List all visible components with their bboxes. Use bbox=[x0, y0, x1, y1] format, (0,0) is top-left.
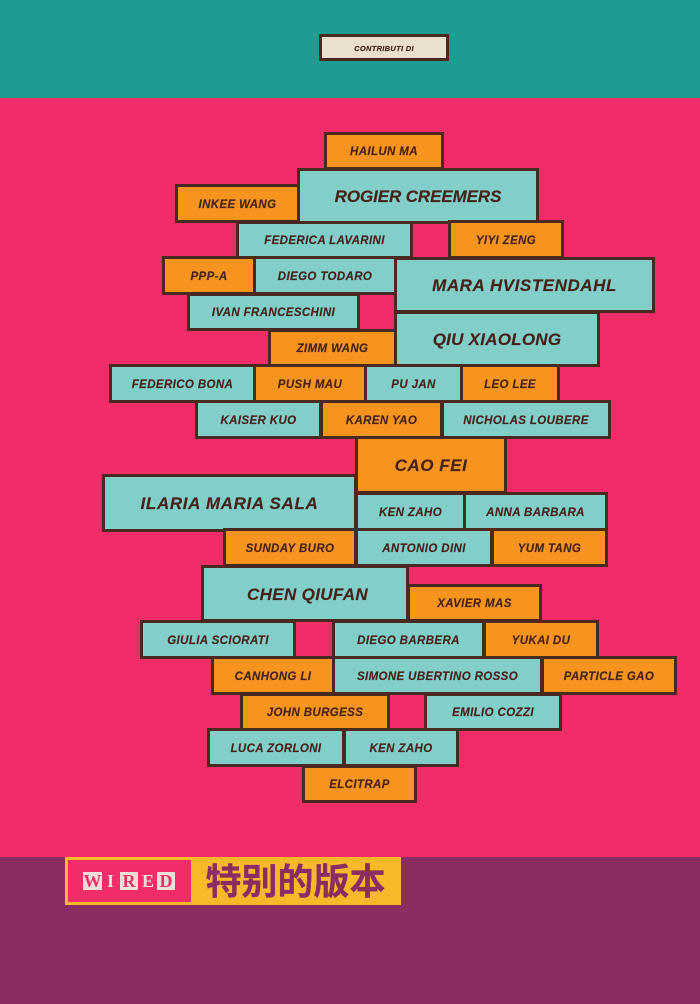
WIRED logo panel bbox=[68, 860, 191, 902]
brick: Xavier Mas bbox=[407, 584, 542, 622]
brick: PPP-A bbox=[162, 256, 256, 295]
brick: Antonio Dini bbox=[355, 528, 493, 567]
brick: Anna Barbara: ANNA BARBARA bbox=[486, 506, 585, 518]
brick: Nicholas Loubere: NICHOLAS LOUBERE bbox=[463, 414, 589, 426]
WIRED logo wordmark: I bbox=[107, 871, 114, 891]
brick: Sunday Buro bbox=[223, 528, 357, 567]
brick: Ilaria Maria Sala bbox=[102, 474, 357, 532]
teal header band bbox=[0, 0, 700, 98]
brick: Federica Lavarini bbox=[236, 221, 413, 259]
brick: Sunday Buro: SUNDAY BURO bbox=[246, 542, 334, 554]
brick: Push Mau bbox=[253, 364, 367, 403]
Chinese title: special edition: 特别的版本 bbox=[206, 861, 386, 902]
brick: Canhong Li: CANHONG LI bbox=[235, 670, 311, 682]
brick: Xavier Mas: XAVIER MAS bbox=[437, 598, 512, 610]
brick: John Burgess bbox=[240, 693, 390, 731]
brick: Qiu Xiaolong: QIU XIAOLONG bbox=[433, 330, 561, 349]
yellow special edition banner bbox=[65, 857, 401, 905]
brick: Luca Zorloni bbox=[207, 728, 345, 767]
brick: Yum Tang bbox=[491, 528, 608, 567]
brick: Simone Ubertino Rosso bbox=[332, 656, 543, 695]
brick: Simone Ubertino Rosso: SIMONE UBERTINO ROSSO bbox=[357, 670, 518, 682]
brick: Yum Tang: YUM TANG bbox=[518, 542, 581, 554]
brick: John Burgess: JOHN BURGESS bbox=[267, 707, 363, 719]
brick: Ken Zaho (second): KEN ZAHO bbox=[369, 742, 433, 754]
brick: Particle Gao bbox=[541, 656, 677, 695]
brick: Leo Lee: LEO LEE bbox=[484, 378, 536, 390]
brick: Diego Barbera: DIEGO BARBERA bbox=[357, 634, 460, 646]
WIRED logo wordmark: D bbox=[160, 871, 172, 891]
brick: Hailun Ma bbox=[324, 132, 444, 170]
brick: Push Mau: PUSH MAU bbox=[278, 378, 342, 390]
brick: Elcitrap bbox=[302, 765, 417, 803]
WIRED logo wordmark bbox=[83, 871, 175, 891]
brick: Giulia Sciorati: GIULIA SCIORATI bbox=[167, 634, 269, 646]
brick: Ken Zaho: KEN ZAHO bbox=[379, 506, 442, 518]
WIRED logo wordmark: E bbox=[142, 871, 154, 891]
brick: Rogier Creemers: ROGIER CREEMERS bbox=[335, 187, 501, 206]
brick: Federico Bona bbox=[109, 364, 256, 403]
purple footer band bbox=[0, 857, 700, 1004]
brick: Rogier Creemers bbox=[297, 168, 539, 224]
brick: Luca Zorloni: LUCA ZORLONI bbox=[230, 742, 322, 754]
brick: Emilio Cozzi: EMILIO COZZI bbox=[452, 707, 534, 719]
brick: Karen Yao bbox=[320, 400, 443, 439]
brick: Elcitrap: ELCITRAP bbox=[329, 779, 390, 791]
brick: Yiyi Zeng bbox=[448, 220, 564, 259]
brick: Kaiser Kuo: KAISER KUO bbox=[220, 414, 296, 426]
brick: Ken Zaho (second) bbox=[343, 728, 459, 767]
brick: Leo Lee bbox=[460, 364, 560, 403]
brick: Yiyi Zeng: YIYI ZENG bbox=[476, 234, 536, 246]
brick: Cao Fei bbox=[355, 436, 507, 494]
brick: Diego Todaro: DIEGO TODARO bbox=[278, 270, 372, 282]
brick: Inkee Wang: INKEE WANG bbox=[199, 198, 276, 210]
brick: Nicholas Loubere bbox=[441, 400, 611, 439]
heading label: contributi di: CONTRIBUTI DI bbox=[354, 44, 414, 52]
WIRED logo wordmark: W bbox=[84, 871, 102, 891]
panel: contributor name bricks bbox=[102, 132, 677, 803]
brick: Yukai Du bbox=[483, 620, 599, 659]
brick: Qiu Xiaolong bbox=[394, 311, 600, 367]
brick: Inkee Wang bbox=[175, 184, 300, 223]
brick: Chen Qiufan bbox=[201, 565, 409, 622]
brick: Zimm Wang: ZIMM WANG bbox=[297, 343, 368, 355]
brick: Cao Fei: CAO FEI bbox=[395, 456, 467, 475]
brick: Federica Lavarini: FEDERICA LAVARINI bbox=[264, 235, 385, 247]
brick: Diego Barbera bbox=[332, 620, 485, 659]
brick: Ivan Franceschini bbox=[187, 293, 360, 331]
brick: Pu Jan: PU JAN bbox=[391, 378, 436, 390]
brick: Hailun Ma: HAILUN MA bbox=[350, 146, 418, 158]
WIRED logo wordmark: R bbox=[122, 871, 136, 891]
brick: Mara Hvistendahl bbox=[394, 257, 655, 313]
brick: Diego Todaro bbox=[253, 256, 397, 295]
brick: Federico Bona: FEDERICO BONA bbox=[132, 378, 233, 390]
heading label: contributi di bbox=[319, 34, 449, 61]
brick: Kaiser Kuo bbox=[195, 400, 322, 439]
brick: Karen Yao: KAREN YAO bbox=[346, 414, 417, 426]
brick: Giulia Sciorati bbox=[140, 620, 296, 659]
brick: Mara Hvistendahl: MARA HVISTENDAHL bbox=[432, 276, 617, 295]
brick: Yukai Du: YUKAI DU bbox=[512, 634, 570, 646]
brick: PPP-A: PPP-A bbox=[190, 270, 228, 282]
brick: Emilio Cozzi bbox=[424, 693, 562, 731]
brick: Ilaria Maria Sala: ILARIA MARIA SALA bbox=[141, 494, 318, 513]
brick: Chen Qiufan: CHEN QIUFAN bbox=[247, 584, 368, 604]
brick: Antonio Dini: ANTONIO DINI bbox=[382, 542, 466, 554]
brick: Canhong Li bbox=[211, 656, 335, 695]
brick: Particle Gao: PARTICLE GAO bbox=[564, 670, 654, 682]
brick: Pu Jan bbox=[364, 364, 463, 403]
brick: Anna Barbara bbox=[463, 492, 608, 531]
brick: Ivan Franceschini: IVAN FRANCESCHINI bbox=[212, 307, 335, 319]
brick: Zimm Wang bbox=[268, 329, 397, 367]
brick: Ken Zaho bbox=[355, 492, 466, 531]
